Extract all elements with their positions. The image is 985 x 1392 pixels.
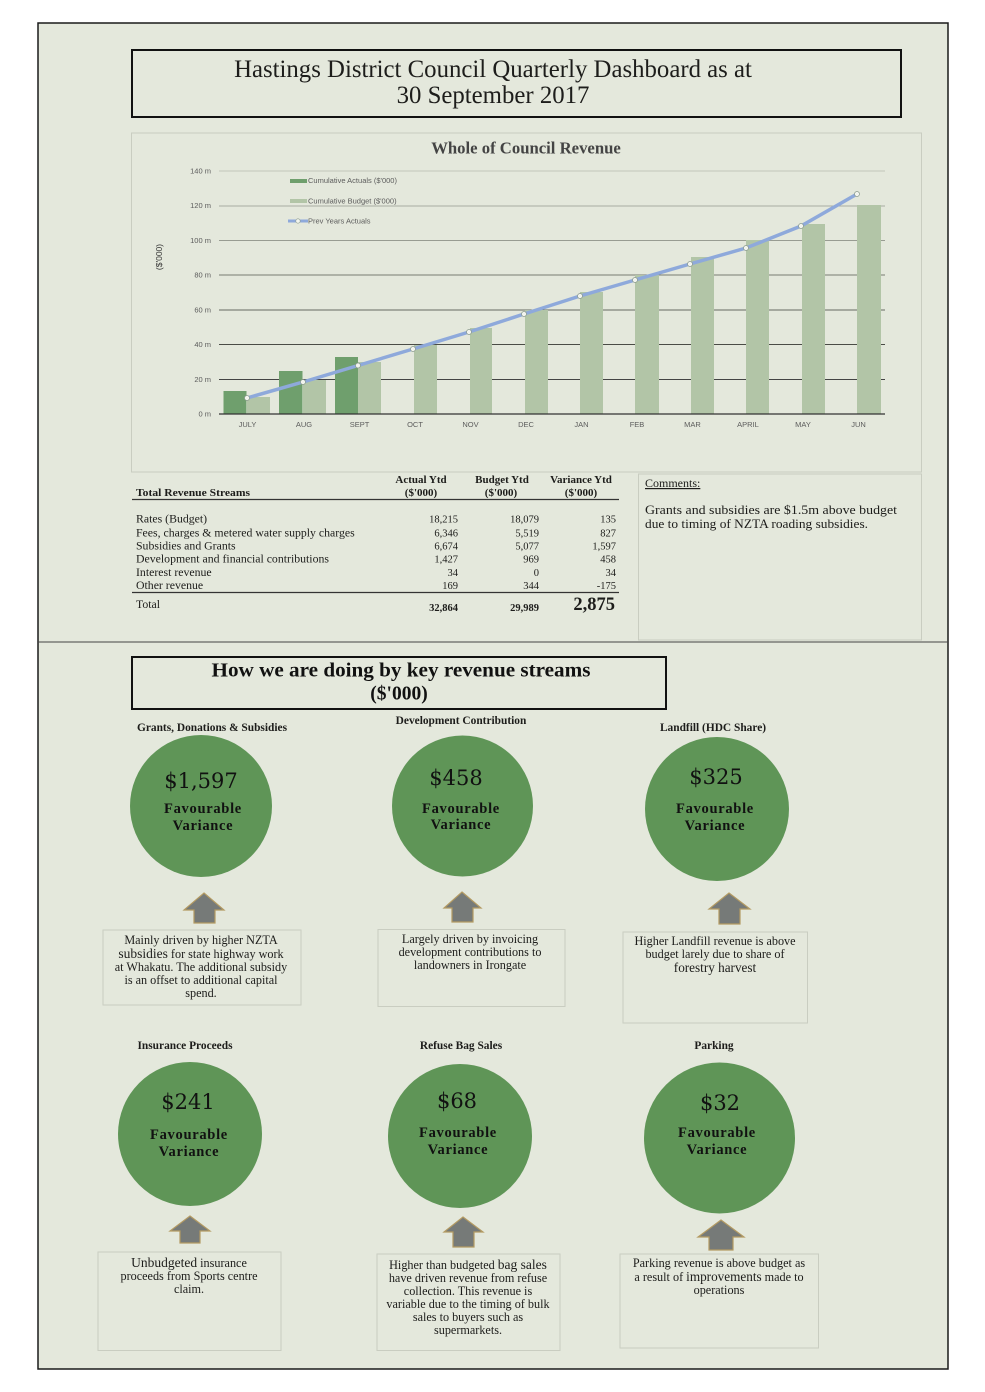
x axis labels: NOV: [462, 420, 479, 429]
panel: refuse bag sales: [377, 1040, 560, 1350]
chart title: Whole of Council Revenue: [431, 138, 621, 158]
table rows: 344: [523, 581, 540, 592]
table rows: 6,346: [434, 528, 458, 540]
circle: landfill variance: Favourable: [676, 801, 754, 817]
table total: 32,864: [429, 603, 459, 614]
icon: up arrow: [444, 1217, 483, 1247]
table rows: 5,519: [515, 528, 539, 540]
table header: Variance Ytd: [550, 474, 612, 486]
circle: insurance variance: Variance: [159, 1144, 219, 1160]
icon: up arrow: [444, 892, 481, 922]
text block: refuse: sales to buyers such as: [413, 1310, 523, 1324]
x axis labels: APRIL: [737, 420, 759, 429]
line: previous years actuals: [244, 192, 860, 400]
text block: refuse: have driven revenue from refuse: [389, 1271, 547, 1285]
text block: insurance: proceeds from Sports centre: [120, 1269, 258, 1283]
icon: up arrow: [709, 893, 750, 924]
circle: landfill variance: $325: [689, 765, 743, 789]
text block: refuse: variable due to the timing of bulk: [386, 1297, 550, 1311]
table rows: Interest revenue: [136, 565, 212, 579]
text block: parking: Parking revenue is above budget as: [633, 1256, 805, 1270]
panel: comments: Comments:: [645, 476, 700, 490]
text block: grants: spend.: [185, 986, 217, 1000]
x axis labels: SEPT: [350, 420, 370, 429]
table header: ($'000): [565, 487, 598, 499]
panel: comments: due to timing of NZTA roading subsidies.: [645, 517, 868, 531]
table rows: Rates (Budget): [136, 512, 207, 526]
text block: landfill: budget larely due to share of: [645, 947, 785, 961]
text block: insurance: Unbudgeted insurance: [131, 1255, 247, 1270]
table rows: 5,077: [515, 542, 539, 552]
circle: grants variance: Favourable: [164, 801, 242, 817]
title: [132, 50, 901, 117]
x axis labels: MAY: [795, 420, 811, 429]
y axis with gridlines: 40 m: [194, 340, 211, 349]
table rows: 18,215: [429, 514, 458, 526]
x axis labels: [239, 420, 866, 429]
table header: Actual Ytd: [395, 474, 447, 486]
table rows: 1,597: [592, 542, 616, 552]
x axis labels: OCT: [407, 420, 423, 429]
table total: 29,989: [510, 603, 539, 614]
circle: refuse variance: $68: [437, 1089, 477, 1113]
panel: revenue chart: [132, 133, 922, 472]
y axis with gridlines: 60 m: [194, 306, 211, 314]
bars: cumulative actuals: [224, 357, 358, 414]
section heading: [132, 657, 666, 709]
circle: grants variance: Variance: [173, 818, 233, 834]
x axis labels: FEB: [630, 420, 644, 429]
panel: comments: [638, 474, 922, 640]
circle: refuse variance: Favourable: [419, 1125, 497, 1141]
chart legend: [288, 176, 397, 226]
y axis with gridlines: 120 m: [190, 201, 211, 210]
panel: grants: [103, 722, 301, 1005]
circle: insurance variance: $241: [161, 1090, 215, 1114]
chart legend: Prev Years Actuals: [308, 216, 371, 226]
x axis labels: DEC: [518, 420, 534, 429]
circle: development variance: $458: [429, 766, 483, 790]
table rows: 18,079: [510, 514, 539, 526]
text block: refuse: Higher than budgeted bag sales: [389, 1257, 547, 1272]
text block: insurance: claim.: [174, 1282, 204, 1296]
x axis labels: JUN: [851, 420, 866, 429]
panel: parking: Parking: [694, 1040, 734, 1052]
panel: grants: Grants, Donations & Subsidies: [137, 722, 288, 734]
text block: grants: at Whakatu. The additional subsidy: [115, 960, 288, 974]
icon: up arrow: [170, 1216, 210, 1243]
table rows: Fees, charges & metered water supply charges: [136, 526, 355, 540]
circle: landfill variance: [645, 737, 789, 881]
table rows: -175: [597, 581, 616, 592]
text block: landfill: [623, 932, 808, 1023]
table rows: 969: [523, 554, 539, 566]
y axis with gridlines: 100 m: [190, 236, 211, 245]
table header: [136, 474, 612, 499]
table rows: Subsidies and Grants: [136, 538, 236, 552]
circle: grants variance: $1,597: [164, 769, 238, 793]
panel: insurance proceeds: Insurance Proceeds: [137, 1040, 233, 1052]
icon: up arrow: [184, 893, 224, 923]
revenue table: [132, 474, 619, 615]
y axis with gridlines: ($'000): [154, 244, 164, 270]
table rows: Development and financial contributions: [136, 552, 329, 566]
text block: insurance: [98, 1252, 281, 1350]
title: Hastings District Council Quarterly Dashboard as at: [234, 56, 752, 83]
y axis with gridlines: 80 m: [194, 270, 211, 280]
table rows: 1,427: [434, 554, 458, 566]
y axis with gridlines: 140 m: [190, 166, 211, 176]
panel: comments: Grants and subsidies are $1.5m above budget: [645, 503, 898, 517]
text block: development: landowners in Irongate: [414, 958, 526, 972]
table rows: Other revenue: [136, 578, 203, 592]
x axis labels: AUG: [296, 420, 312, 429]
table rows: 135: [600, 514, 616, 526]
table rows: 6,674: [434, 542, 459, 552]
text block: parking: [620, 1254, 818, 1348]
y axis with gridlines: 20 m: [194, 375, 211, 384]
circle: parking variance: [644, 1062, 795, 1214]
text block: development: [378, 930, 565, 1006]
chart legend: Cumulative Actuals ($'000): [308, 176, 397, 185]
circle: development variance: [392, 736, 533, 876]
panel: development contribution: Development Contribution: [396, 715, 527, 727]
x axis labels: JAN: [574, 420, 589, 429]
text block: refuse: supermarkets.: [434, 1323, 502, 1337]
text block: grants: Mainly driven by higher NZTA: [124, 933, 278, 947]
section heading: ($'000): [370, 684, 428, 704]
table total: [136, 595, 615, 615]
text block: development: development contributions to: [399, 945, 541, 959]
panel: refuse bag sales: Refuse Bag Sales: [420, 1040, 503, 1052]
circle: landfill variance: Variance: [685, 818, 745, 834]
panel: parking: [620, 1040, 818, 1348]
panel: landfill: [623, 722, 808, 1023]
table rows: 34: [448, 568, 459, 579]
x axis labels: JULY: [239, 420, 256, 429]
circle: refuse variance: [388, 1064, 532, 1208]
table header: Total Revenue Streams: [136, 487, 251, 499]
text block: refuse: collection. This revenue is: [404, 1284, 532, 1298]
text block: grants: [103, 930, 301, 1005]
table rows: 169: [442, 581, 458, 592]
y axis with gridlines: 0 m: [198, 410, 211, 418]
text block: landfill: forestry harvest: [674, 960, 757, 975]
table header: ($'000): [485, 487, 518, 499]
circle: grants variance: [130, 735, 272, 877]
y axis with gridlines: [154, 166, 885, 418]
table rows: 0: [534, 568, 539, 579]
text block: parking: a result of improvements made to: [634, 1269, 804, 1284]
circle: refuse variance: Variance: [428, 1142, 488, 1158]
bars: cumulative budget: [247, 205, 881, 414]
table rows: 458: [600, 554, 616, 566]
icon: up arrow: [698, 1220, 744, 1250]
panel: insurance proceeds: [98, 1040, 281, 1350]
table header: ($'000): [405, 487, 438, 499]
x axis labels: MAR: [684, 420, 701, 429]
circle: parking variance: $32: [700, 1091, 740, 1115]
circle: development variance: Variance: [431, 817, 491, 833]
circle: development variance: Favourable: [422, 801, 500, 817]
circle: insurance variance: Favourable: [150, 1127, 228, 1143]
chart legend: Cumulative Budget ($'000): [308, 196, 397, 206]
table rows: [136, 512, 617, 592]
title: 30 September 2017: [397, 82, 589, 109]
panel: development contribution: [378, 715, 565, 1006]
section heading: How we are doing by key revenue streams: [212, 660, 591, 682]
circle: insurance variance: [118, 1062, 262, 1206]
table rows: 34: [606, 568, 617, 579]
text block: parking: operations: [694, 1283, 745, 1297]
text block: development: Largely driven by invoicing: [402, 932, 538, 946]
table rows: 827: [600, 528, 616, 540]
table header: Budget Ytd: [475, 474, 529, 486]
circle: parking variance: Favourable: [678, 1125, 756, 1141]
panel: landfill: Landfill (HDC Share): [660, 722, 766, 734]
text block: grants: is an offset to additional capital: [124, 973, 278, 987]
text block: landfill: Higher Landfill revenue is above: [634, 934, 796, 948]
text block: grants: subsidies for state highway work: [118, 946, 285, 961]
circle: parking variance: Variance: [687, 1142, 747, 1158]
table total: 2,875: [573, 595, 615, 615]
table total: Total: [136, 597, 161, 611]
text block: refuse: [377, 1254, 560, 1350]
